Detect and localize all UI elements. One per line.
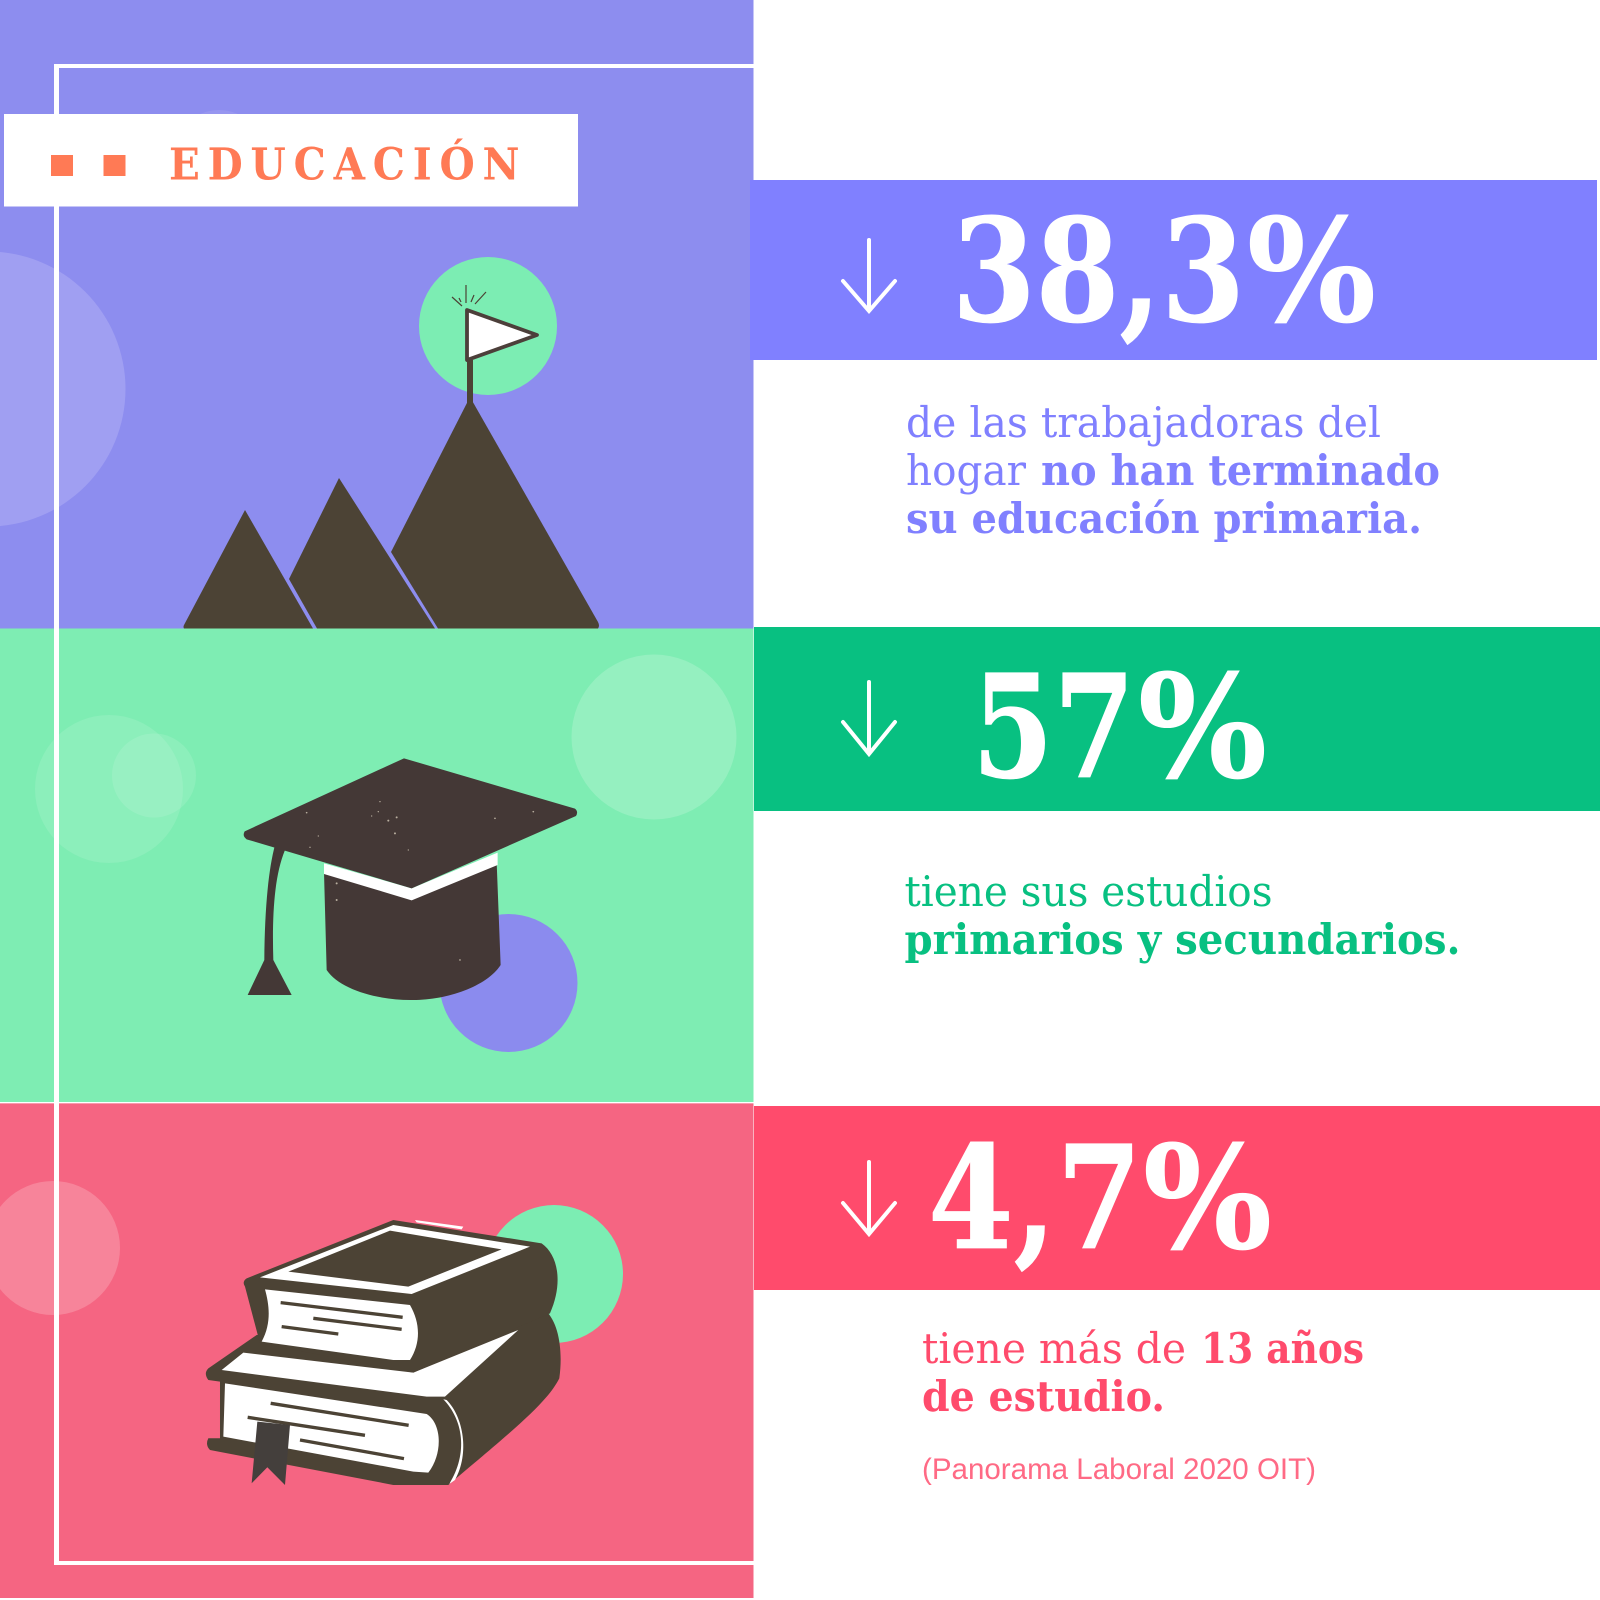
stat text: purple: su educación primaria.	[906, 494, 1422, 543]
panel: pink books	[0, 1103, 754, 1598]
heading label	[4, 114, 578, 206]
arrow	[843, 1162, 895, 1234]
stat value	[972, 643, 1267, 811]
source note: (Panorama Laboral 2020 OIT)	[922, 1453, 1316, 1486]
stat text: green: tiene sus estudios	[904, 867, 1272, 916]
decorative circle right	[572, 654, 736, 820]
decorative circles left	[35, 715, 196, 863]
stat text: red: tiene más de	[922, 1324, 1186, 1373]
panel: purple mountains	[0, 0, 754, 628]
decorative large circle	[0, 252, 126, 526]
arrow	[843, 682, 895, 754]
stat text: purple: no han terminado	[1041, 446, 1440, 495]
stat text: green: primarios y secundarios.	[904, 915, 1460, 964]
decorative circle	[0, 1181, 120, 1315]
icon: stack of books	[206, 1220, 561, 1485]
stat value: 38,3	[952, 187, 1245, 355]
frame lines	[0, 64, 754, 1565]
stat text: red	[922, 1324, 1364, 1421]
stat text: purple	[906, 398, 1440, 543]
green circle behind books	[485, 1205, 623, 1343]
stat bar: green	[754, 627, 1600, 811]
stat text: purple: de las trabajadoras del	[906, 398, 1381, 447]
heading text: EDUCACIÓN	[169, 138, 520, 190]
icon: graduation cap	[244, 758, 577, 1000]
stat bar: purple	[750, 180, 1597, 360]
stat bar: red	[754, 1106, 1600, 1290]
purple circle behind cap	[440, 914, 578, 1052]
bookmark	[252, 1422, 290, 1485]
heading squares	[51, 155, 126, 176]
stat text: purple: hogar	[906, 446, 1027, 495]
stat value: %	[1247, 187, 1376, 355]
stat value: 4,7	[928, 1114, 1142, 1282]
stat text: green	[904, 867, 1460, 964]
icon: mountains with flag	[184, 257, 599, 628]
stat value: 57	[972, 643, 1135, 811]
stat value: %	[1143, 1114, 1272, 1282]
stat text: red: 13 años	[1201, 1324, 1364, 1373]
stat text: red: de estudio.	[922, 1372, 1165, 1421]
panel: green graduation cap	[0, 628, 754, 1102]
stat value: %	[1138, 643, 1267, 811]
arrow	[843, 240, 895, 311]
